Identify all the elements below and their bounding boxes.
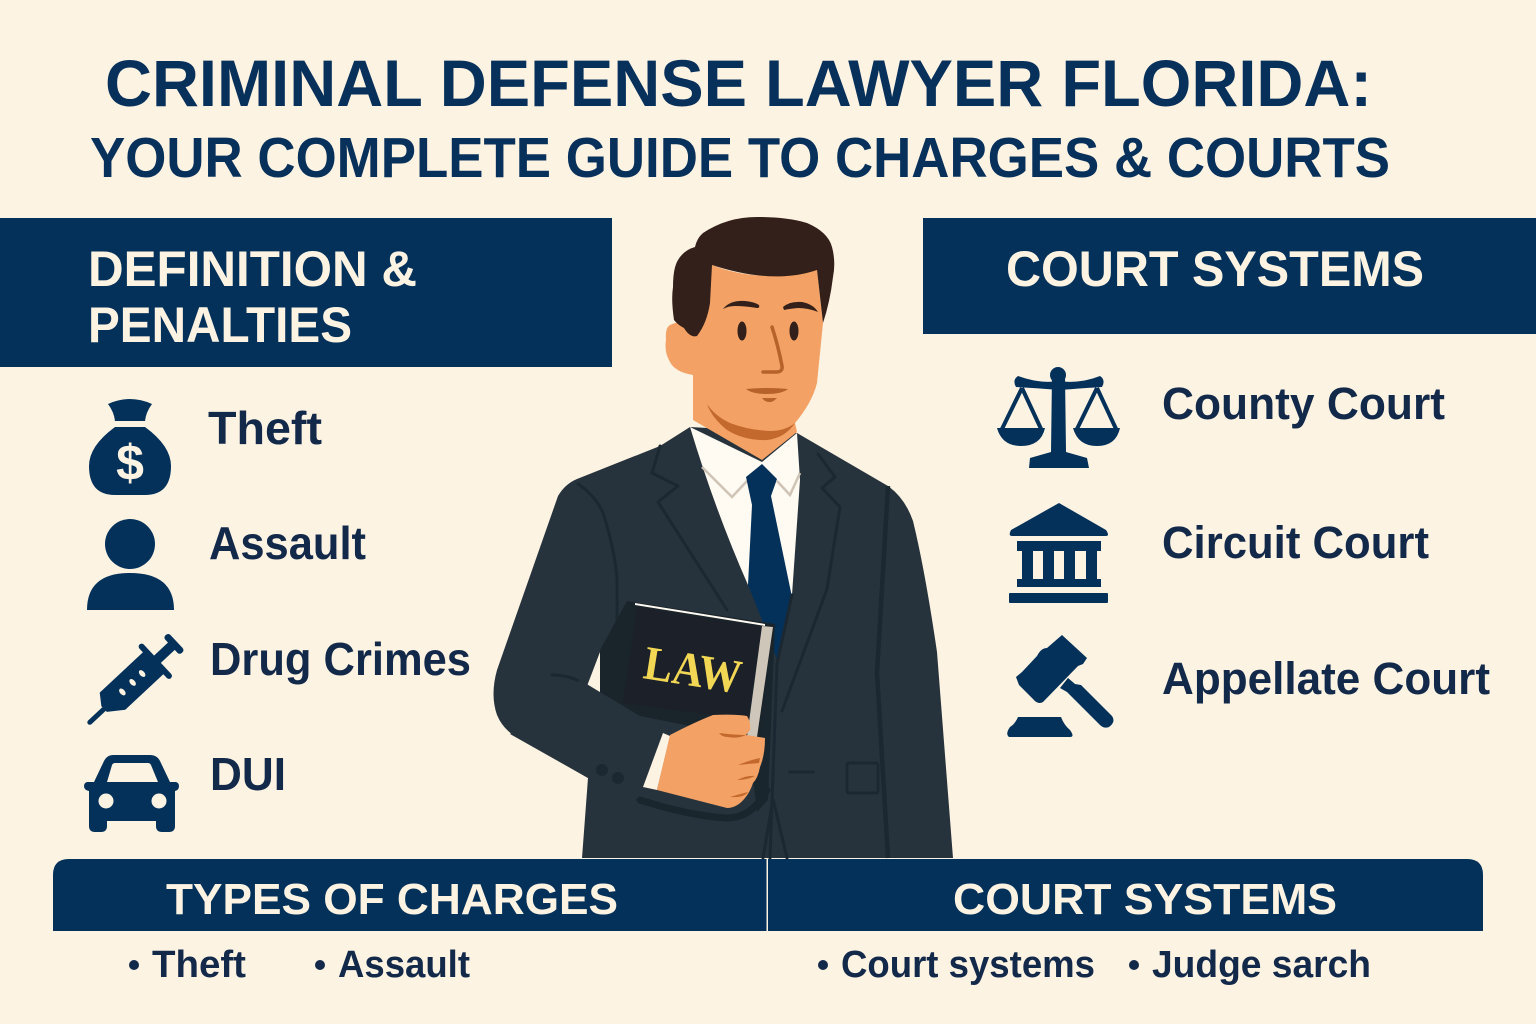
jacket lines [552, 446, 878, 858]
title: CRIMINAL DEFENSE LAWYER FLORIDA: [105, 46, 1372, 120]
panel: definition and penalties header: DEFINITION & [88, 241, 417, 297]
panel: bottom bar [53, 859, 1483, 931]
icon: syringe [72, 625, 192, 741]
sleeve [510, 680, 663, 803]
label: Assault: Assault [209, 517, 366, 569]
shadow beneath hand [640, 790, 767, 818]
icon: scales of justice [997, 367, 1120, 468]
eyes [738, 322, 746, 340]
illustration: lawyer [494, 217, 953, 858]
title: YOUR COMPLETE GUIDE TO CHARGES & COURTS [90, 126, 1390, 190]
jacket [494, 427, 953, 858]
panel: bottom bar: COURT SYSTEMS [953, 875, 1337, 924]
right sleeve seam [877, 486, 888, 858]
label: DUI: DUI [210, 748, 286, 800]
brows [723, 301, 818, 312]
fingers [719, 733, 760, 797]
panel: definition and penalties header: PENALTIES [88, 297, 352, 353]
list: types of charges [129, 944, 470, 986]
tie [746, 464, 792, 660]
book [600, 601, 775, 740]
icon: money bag: $ [116, 435, 144, 491]
list: court systems: Judge sarch [1152, 944, 1371, 986]
hair [672, 217, 834, 336]
icon: car [84, 755, 179, 832]
icon: money bag [89, 399, 171, 495]
collar shadow [702, 467, 800, 497]
label: Circuit Court: Circuit Court [1162, 517, 1429, 568]
label: County Court: County Court [1162, 378, 1445, 429]
nose [763, 327, 782, 372]
arm gap [587, 652, 600, 694]
label: Theft: Theft [208, 402, 322, 454]
icon: courthouse [1009, 503, 1108, 603]
label: Appellate Court: Appellate Court [1162, 653, 1490, 704]
shadow beside book [748, 624, 775, 812]
label: Drug Crimes: Drug Crimes [210, 633, 471, 685]
panel: definition and penalties header [0, 218, 612, 367]
sleeve buttons [596, 764, 624, 784]
list: court systems: Court systems [841, 944, 1095, 986]
jaw shadow [707, 404, 795, 440]
shirt [690, 427, 800, 595]
mouth [746, 388, 788, 402]
title [90, 46, 1390, 190]
cuff [643, 733, 670, 790]
icon: person [87, 519, 174, 610]
hand [657, 715, 765, 808]
icon: gavel [1007, 635, 1113, 737]
panel: bottom bar: TYPES OF CHARGES [166, 875, 618, 924]
list: court systems [818, 944, 1371, 986]
list: types of charges: Assault [338, 944, 470, 986]
list: types of charges: Theft [152, 944, 246, 986]
panel: court systems header: COURT SYSTEMS [1006, 241, 1424, 297]
book: LAW [640, 637, 745, 704]
panel: court systems header [923, 218, 1536, 334]
neck and face [666, 265, 823, 460]
